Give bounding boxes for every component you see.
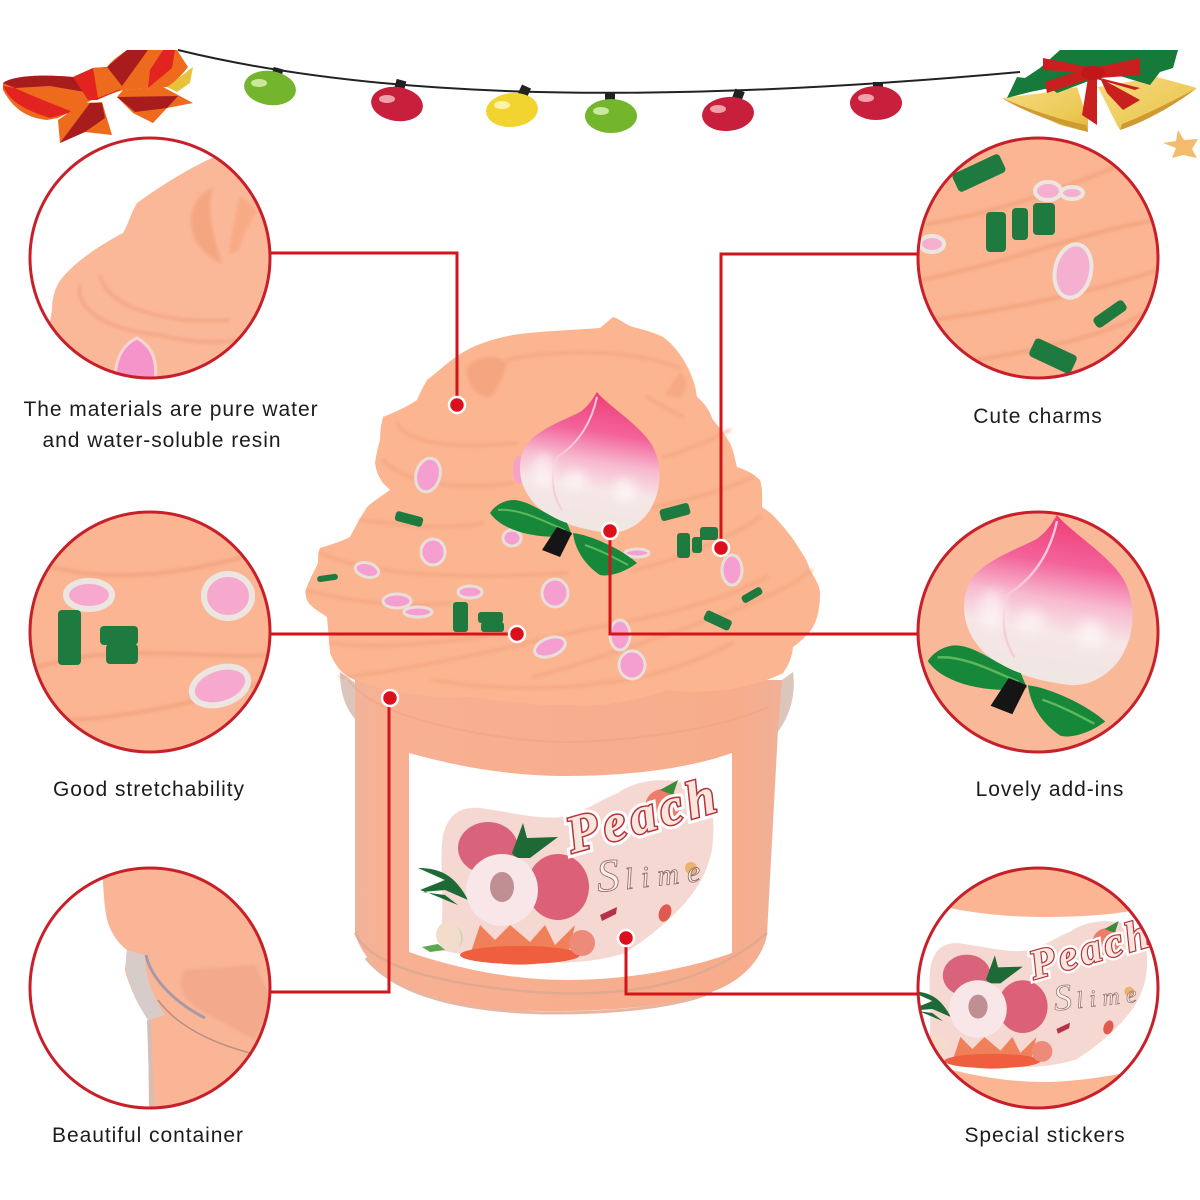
toppings: charms on slime — [317, 455, 764, 679]
caption: materials: and water-soluble resin — [43, 429, 281, 452]
sticker artwork — [418, 766, 727, 965]
panel: stickers detail: Slime — [1051, 968, 1144, 1019]
icon: red light — [701, 89, 755, 133]
sticker title: Peach — [559, 766, 727, 865]
caption: stretchability: Good stretchability — [53, 778, 245, 801]
caption: container: Beautiful container — [52, 1124, 244, 1147]
sticker title: Slime — [594, 840, 710, 902]
icon: red bow with bell — [3, 50, 193, 143]
panel: stickers detail: Peach — [1023, 909, 1158, 988]
panel: stickers detail — [911, 868, 1165, 1108]
panel: swirl detail — [30, 138, 275, 380]
jar — [340, 672, 794, 1013]
caption: materials — [23, 398, 319, 452]
panel: stretch detail — [30, 512, 270, 752]
icon: yellow light — [485, 84, 539, 129]
icon: red light — [369, 79, 425, 124]
sticker label — [409, 753, 732, 980]
peach charm on slime — [490, 392, 660, 575]
icon: red light — [850, 82, 902, 120]
icon: gold star — [1163, 130, 1198, 158]
panel: cute charms detail — [918, 138, 1158, 378]
slime swirl — [306, 317, 820, 706]
caption: add-ins: Lovely add-ins — [976, 778, 1124, 801]
panel: add-ins detail — [918, 512, 1158, 752]
icon: green light — [242, 67, 298, 108]
panel: container detail — [30, 865, 275, 1110]
callout lines — [268, 253, 920, 994]
caption: cute charms: Cute charms — [973, 405, 1103, 428]
caption: materials: The materials are pure water — [23, 398, 319, 421]
icon: green light — [585, 92, 637, 133]
sticker title: Peach — [559, 766, 727, 865]
garland: string of lights — [178, 50, 1020, 133]
caption: stickers: Special stickers — [964, 1124, 1126, 1147]
panel: stickers detail: Peach — [1023, 909, 1158, 988]
icon: Christmas bells with holly — [1002, 50, 1197, 132]
callout dots — [382, 397, 729, 946]
